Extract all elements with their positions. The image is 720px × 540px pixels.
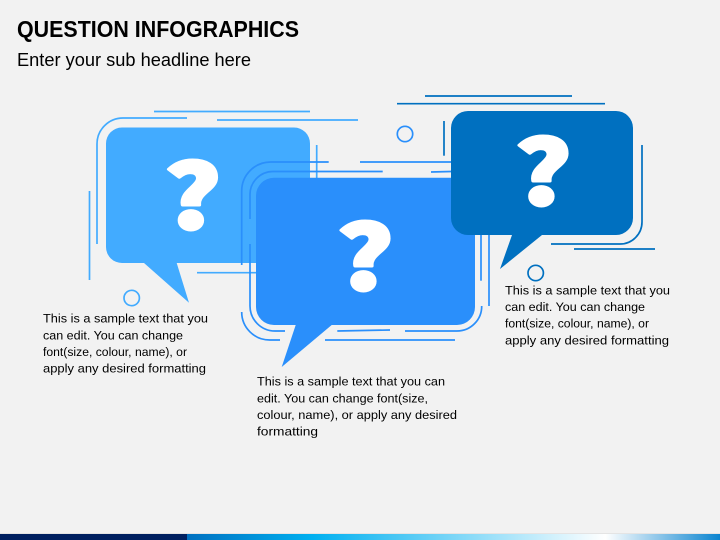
icon: left question mark: ? (164, 128, 221, 255)
text block: left (43, 312, 208, 376)
title: QUESTION INFOGRAPHICS (17, 16, 299, 42)
right bubble shape (451, 111, 633, 269)
text block: centre: colour, name), or apply any desired (257, 408, 457, 422)
text block: centre (257, 374, 457, 438)
panel: centre blue speech bubble (242, 162, 489, 367)
text block: right (505, 284, 670, 348)
left bubble accent lines (90, 112, 358, 280)
subtitle: Enter your sub headline here (17, 50, 251, 70)
text block: centre: This is a sample text that you can (257, 374, 445, 388)
text block: right: can edit. You can change (505, 300, 645, 314)
icon: left bubble ring (124, 290, 139, 306)
text block: centre: formatting (257, 424, 318, 438)
panel: right dark-blue speech bubble (397, 96, 655, 281)
text block: right: apply any desired formatting (505, 334, 669, 348)
icon: right question mark: ? (514, 104, 572, 231)
right bubble accent lines (397, 96, 655, 249)
centre bubble accent lines (242, 162, 489, 340)
text block: left: apply any desired formatting (43, 362, 206, 376)
text block: left: font(size, colour, name), or (43, 345, 187, 359)
footer bar (0, 533, 720, 540)
left bubble shape (106, 128, 310, 303)
centre bubble shape (256, 178, 475, 367)
text block: right: font(size, colour, name), or (505, 316, 649, 330)
panel: left light-blue speech bubble (90, 112, 358, 306)
text block: left: can edit. You can change (43, 328, 183, 342)
text block: right: This is a sample text that you (505, 284, 670, 298)
icon: centre question mark: ? (336, 189, 394, 316)
icon: lower ring (528, 265, 543, 281)
text block: centre: edit. You can change font(size, (257, 392, 428, 406)
text block: left: This is a sample text that you (43, 312, 208, 326)
icon: upper ring (397, 126, 413, 142)
